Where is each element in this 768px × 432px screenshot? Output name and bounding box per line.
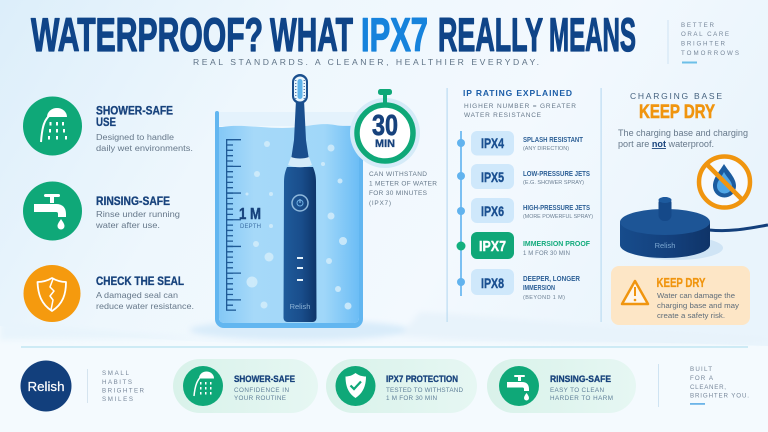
brush head: [292, 74, 308, 104]
water: [219, 124, 359, 323]
30 min timer: [350, 89, 420, 168]
logo: Relish: [28, 379, 64, 394]
footer pill: IPX7 protection: TESTED TO WITHSTAND: [386, 387, 463, 394]
timer caption: CAN WITHSTAND: [369, 171, 427, 178]
depth label: 1 M: [239, 206, 261, 223]
footer pill: rinsing-safe: HARDER TO HARM: [550, 395, 613, 402]
intro text: HIGHER NUMBER = GREATER: [464, 103, 576, 110]
30 min timer: MIN: [375, 138, 395, 150]
panel: rinsing-safe: Rinse under running: [96, 209, 180, 219]
panel: IP rating explained: [456, 88, 593, 301]
icon: faucet: [507, 375, 529, 400]
footer tagline right: BRIGHTER YOU.: [690, 392, 749, 400]
toothbrush: Relish: [290, 302, 310, 311]
panel: charging base: port are not waterproof.: [618, 139, 714, 149]
panel: check the seal: A damaged seal can: [96, 290, 178, 300]
IPX7 row: [471, 232, 590, 259]
timeline: [456, 131, 466, 296]
footer pill: IPX7 protection: [326, 359, 477, 413]
footer tagline right: [690, 366, 749, 405]
icon: shield check: [346, 373, 366, 398]
IPX6 row: HIGH-PRESSURE JETS: [523, 205, 590, 212]
keep dry heading: KEEP DRY: [639, 102, 715, 123]
power button: [292, 195, 308, 211]
charging base device: Relish: [655, 241, 675, 250]
charging base device: [620, 197, 768, 260]
warning box: Water can damage the: [657, 291, 735, 300]
title: REALLY: [438, 8, 543, 61]
warning box: [611, 266, 750, 325]
footer pill: rinsing-safe: EASY TO CLEAN: [550, 387, 604, 394]
panel: rinsing-safe: water after use.: [95, 220, 160, 230]
footer pill: rinsing-safe: [487, 359, 636, 413]
footer tagline left: SMILES: [102, 396, 133, 403]
tagline top right: TOMORROWS: [681, 50, 739, 57]
panel: check the seal: reduce water resistance.: [96, 301, 194, 311]
bubbles: [246, 141, 352, 310]
footer tagline left: HABITS: [102, 379, 132, 386]
footer pill: shower-safe: [173, 359, 318, 413]
warning box: charging base and may: [657, 301, 739, 310]
panel: rinsing-safe: [23, 182, 180, 240]
panel: charging base: CHARGING BASE: [630, 91, 722, 101]
IPX5 row: LOW-PRESSURE JETS: [523, 171, 590, 178]
IPX5 row: IPX5: [481, 169, 504, 185]
timer caption: [369, 171, 437, 207]
title: [31, 8, 636, 61]
icon: cracked shield: [38, 278, 66, 311]
footer tagline right: FOR A: [690, 375, 714, 382]
IPX8 row: IMMERSION: [523, 285, 555, 292]
subtitle: REAL STANDARDS. A CLEANER, HEALTHIER EVERYDAY.: [193, 57, 539, 67]
IPX6 row: [471, 198, 593, 223]
footer pill: shower-safe: YOUR ROUTINE: [234, 395, 286, 402]
footer pill: shower-safe: CONFIDENCE IN: [234, 387, 289, 394]
IPX7 row: IPX7: [479, 238, 506, 255]
IPX8 row: [471, 269, 580, 301]
footer tagline left: BRIGHTER: [102, 388, 145, 394]
title: IPX7: [361, 8, 428, 61]
panel: shower-safe use: Designed to handle: [96, 132, 174, 142]
footer tagline right: BUILT: [690, 366, 712, 373]
panel: check the seal: CHECK THE SEAL: [96, 276, 184, 288]
timer caption: FOR 30 MINUTES: [369, 190, 428, 197]
panel: charging base: [611, 91, 768, 325]
footer tagline right: CLEANER,: [690, 384, 726, 391]
icon: faucet: [34, 194, 66, 230]
IPX4 row: SPLASH RESISTANT: [523, 137, 584, 144]
tagline top right: [668, 20, 739, 64]
panel: shower-safe use: USE: [96, 117, 116, 129]
panel: shower-safe use: daily wet environments.: [96, 143, 193, 153]
footer pill: IPX7 protection: 1 M FOR 30 MIN: [386, 395, 437, 402]
timer caption: (IPX7): [369, 200, 391, 207]
timer caption: 1 METER OF WATER: [369, 180, 437, 188]
panel: shower-safe use: SHOWER-SAFE: [96, 106, 173, 118]
depth label: [239, 206, 261, 230]
IPX4 row: IPX4: [481, 135, 504, 151]
heading: IP RATING EXPLAINED: [463, 88, 572, 98]
panel: rinsing-safe: RINSING-SAFE: [96, 196, 170, 208]
IPX4 row: [471, 131, 584, 156]
water tank: [215, 111, 363, 328]
IPX8 row: IPX8: [481, 275, 504, 291]
IPX8 row: (BEYOND 1 M): [523, 295, 565, 301]
footer pill: shower-safe: SHOWER-SAFE: [234, 374, 295, 385]
icon: shower: [194, 372, 214, 396]
depth label: DEPTH: [240, 224, 261, 230]
title: WATERPROOF?: [31, 8, 263, 61]
intro text: [464, 103, 576, 119]
icon: shower: [41, 108, 67, 142]
IPX8 row: DEEPER, LONGER: [523, 276, 580, 283]
icon: no water: [697, 154, 752, 210]
footer pill: IPX7 protection: IPX7 PROTECTION: [386, 374, 458, 385]
logo: [20, 360, 72, 412]
IPX5 row: (E.G. SHOWER SPRAY): [523, 180, 584, 186]
tagline top right: ORAL CARE: [681, 31, 729, 38]
IPX7 row: IMMERSION PROOF: [523, 239, 590, 248]
title: MEANS: [549, 8, 636, 61]
IPX6 row: IPX6: [481, 203, 504, 219]
warning box: KEEP DRY: [656, 276, 706, 290]
tagline top right: BETTER: [681, 22, 715, 29]
IPX5 row: [471, 164, 590, 189]
depth ruler: [226, 139, 241, 311]
intro text: WATER RESISTANCE: [464, 112, 542, 119]
IPX6 row: (MORE POWERFUL SPRAY): [523, 214, 593, 220]
footer tagline left: SMALL: [102, 370, 130, 377]
footer pill: rinsing-safe: RINSING-SAFE: [550, 374, 611, 385]
tagline top right: BRIGHTER: [681, 40, 726, 48]
panel: shower-safe use: [23, 96, 193, 156]
warning box: create a safety risk.: [657, 311, 725, 320]
30 min timer: 30: [372, 110, 398, 142]
title: WHAT: [270, 8, 353, 61]
charging note: The charging base and charging: [618, 128, 748, 138]
toothbrush: [284, 74, 316, 322]
IPX7 row: 1 M FOR 30 MIN: [523, 251, 570, 257]
footer tagline left: [102, 370, 145, 403]
icon: warning triangle: [622, 281, 648, 304]
panel: check the seal: [24, 265, 194, 322]
IPX4 row: (ANY DIRECTION): [523, 146, 569, 152]
